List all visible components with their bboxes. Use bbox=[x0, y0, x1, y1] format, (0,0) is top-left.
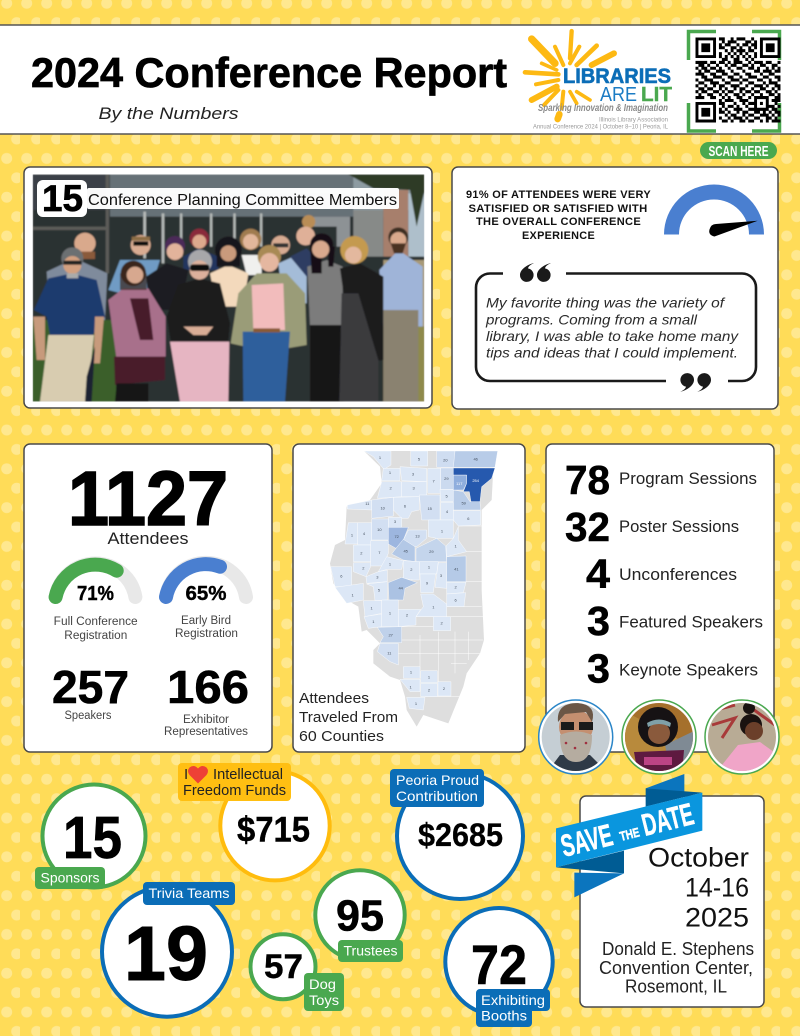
map of Illinois counties: 1 bbox=[352, 592, 355, 597]
map of Illinois counties: 1 bbox=[389, 562, 392, 567]
map of Illinois counties: 6 bbox=[404, 503, 407, 508]
map of Illinois counties: 117 bbox=[456, 481, 463, 486]
stat: unconferences bbox=[586, 551, 737, 597]
bubble: exhibiting booths: Exhibiting bbox=[481, 992, 545, 1008]
gauge: early bird 65 percent: 65% bbox=[186, 583, 227, 605]
bubble: intellectual freedom funds: $715 bbox=[237, 811, 310, 850]
gauge: early bird 65 percent: Early Bird bbox=[181, 615, 231, 627]
map of Illinois counties: 1 bbox=[389, 470, 392, 475]
map caption: Traveled From bbox=[299, 709, 398, 726]
map of Illinois counties: 6 bbox=[467, 516, 470, 521]
bubble: Peoria Proud contribution: $2685 bbox=[418, 817, 503, 853]
map of Illinois counties: 6 bbox=[340, 574, 343, 579]
map of Illinois counties: 72 bbox=[394, 534, 400, 539]
logo: Libraries Are Lit: ARE bbox=[600, 84, 637, 106]
map of Illinois counties: 20 bbox=[443, 457, 448, 462]
satisfaction text: 91% OF ATTENDEES WERE VERY bbox=[466, 189, 651, 201]
bubble: intellectual freedom funds: Freedom Funds bbox=[183, 782, 286, 799]
stat: exhibitor representatives: Representatives bbox=[164, 726, 248, 738]
map of Illinois counties: 2 bbox=[441, 620, 444, 625]
ribbon: save the date: THE bbox=[618, 824, 641, 844]
callout: 15 committee members: Conference Planning Committee Members bbox=[88, 192, 397, 209]
map of Illinois counties: 1 bbox=[455, 543, 458, 548]
bubble: dog toys: Dog bbox=[309, 976, 336, 992]
gauge: full conference 71 percent: Registration bbox=[64, 630, 127, 642]
map caption: 60 Counties bbox=[299, 728, 384, 745]
stat: program sessions bbox=[565, 457, 757, 503]
bubble: Peoria Proud contribution bbox=[390, 769, 523, 899]
logo: Libraries Are Lit: LIBRARIES bbox=[563, 65, 671, 88]
stat: speakers: Speakers bbox=[64, 710, 112, 722]
scan here pill bbox=[700, 142, 777, 160]
1127 attendees: 1127 bbox=[68, 456, 228, 542]
stat: poster sessions bbox=[565, 504, 739, 550]
bubble: sponsors bbox=[35, 784, 146, 889]
bubble: trustees: Trustees bbox=[344, 943, 398, 959]
map of Illinois counties: 7 bbox=[378, 550, 381, 555]
map of Illinois counties: 1 bbox=[351, 532, 354, 537]
logo: Libraries Are Lit: Sparking Innovation & Imagination bbox=[538, 103, 668, 114]
map of Illinois counties: 3 bbox=[376, 574, 379, 579]
map of Illinois counties: 2 bbox=[362, 565, 365, 570]
header band bbox=[0, 25, 800, 134]
callout: 15 committee members bbox=[37, 178, 399, 219]
bubble: exhibiting booths bbox=[445, 908, 553, 1027]
stat: speakers: 257 bbox=[52, 661, 129, 713]
panel: satisfaction and quote bbox=[452, 167, 778, 409]
bubble: trivia teams: 19 bbox=[124, 911, 208, 997]
stat: program sessions: Program Sessions bbox=[619, 469, 757, 488]
date: 2025 bbox=[685, 903, 749, 933]
map of Illinois counties: 3 bbox=[440, 573, 443, 578]
date: October bbox=[648, 843, 749, 873]
title: 2024 Conference Report bbox=[31, 49, 507, 96]
map of Illinois counties: 2 bbox=[406, 612, 409, 617]
bubble: dog toys: Toys bbox=[309, 992, 339, 1008]
map of Illinois counties: 10 bbox=[380, 505, 386, 510]
map of Illinois counties: 5 bbox=[378, 588, 381, 593]
stat: featured speakers: 3 bbox=[587, 598, 610, 644]
map of Illinois counties: 3 bbox=[394, 519, 397, 524]
map of Illinois counties: 27 bbox=[388, 633, 394, 638]
map of Illinois counties: 6 bbox=[455, 597, 458, 602]
map of Illinois counties: 2 bbox=[443, 686, 446, 691]
stat: keynote speakers: 3 bbox=[587, 646, 610, 692]
venue: Rosemont, IL bbox=[625, 977, 727, 997]
stat: keynote speakers: Keynote Speakers bbox=[619, 661, 758, 680]
map of Illinois counties: 29 bbox=[444, 476, 449, 481]
map caption bbox=[299, 690, 398, 745]
map of Illinois counties: 41 bbox=[454, 566, 459, 571]
map of Illinois counties: 4 bbox=[446, 509, 449, 514]
bubble: intellectual freedom funds: Intellectual bbox=[213, 766, 283, 783]
bubble: dog toys bbox=[250, 934, 344, 1011]
logo: Libraries Are Lit: Illinois Library Association bbox=[599, 117, 668, 124]
map of Illinois counties: 1 bbox=[410, 670, 413, 675]
venue bbox=[599, 939, 754, 997]
bubble: trivia teams: Trivia Teams bbox=[148, 885, 230, 901]
panel: committee photo bbox=[24, 167, 432, 408]
gauge: full conference 71 percent bbox=[54, 563, 138, 642]
ribbon: save the date: SAVE bbox=[557, 817, 616, 864]
callout: 15 committee members: 15 bbox=[42, 178, 83, 219]
map of Illinois counties: 1 bbox=[441, 529, 444, 534]
stat: exhibitor representatives: 166 bbox=[167, 661, 249, 713]
quote text: programs. Coming from a small bbox=[485, 311, 698, 327]
date bbox=[648, 843, 749, 933]
gauge: early bird 65 percent: Registration bbox=[175, 628, 238, 640]
gauge: full conference 71 percent: 71% bbox=[77, 583, 114, 605]
satisfaction text: THE OVERALL CONFERENCE bbox=[476, 216, 641, 228]
map of Illinois counties: 1 bbox=[379, 455, 382, 460]
bubble: sponsors: Sponsors bbox=[40, 870, 100, 886]
map of Illinois counties: 1 bbox=[428, 565, 431, 570]
scan here pill: SCAN HERE bbox=[708, 143, 768, 160]
bubble: intellectual freedom funds: I bbox=[184, 766, 188, 783]
map of Illinois counties: 1 bbox=[428, 674, 431, 679]
map of Illinois counties: 1 bbox=[372, 619, 375, 624]
bubble: Peoria Proud contribution: Peoria Proud bbox=[396, 772, 479, 788]
map of Illinois counties: 1 bbox=[389, 610, 392, 615]
map of Illinois counties: 7 bbox=[433, 478, 436, 483]
bubble: sponsors: 15 bbox=[63, 805, 122, 871]
map of Illinois counties: 1 bbox=[410, 685, 413, 690]
map of Illinois counties: 9 bbox=[426, 580, 429, 585]
venue: Convention Center, bbox=[599, 958, 753, 978]
map of Illinois counties: 2 bbox=[455, 585, 458, 590]
bubble: trustees bbox=[315, 870, 405, 962]
logo: Libraries Are Lit: LIT bbox=[641, 84, 672, 106]
stat: featured speakers bbox=[587, 598, 763, 644]
panel: attendees bbox=[24, 444, 272, 752]
map of Illinois counties: 45 bbox=[403, 548, 409, 553]
stat: poster sessions: Poster Sessions bbox=[619, 517, 739, 536]
avatar: speaker with beard bbox=[539, 700, 613, 775]
map of Illinois counties: 10 bbox=[377, 527, 382, 532]
venue: Donald E. Stephens bbox=[602, 939, 754, 959]
quote frame bbox=[476, 263, 756, 392]
map of Illinois counties: 3 bbox=[412, 471, 415, 476]
logo: Libraries Are Lit bbox=[525, 31, 672, 131]
map of Illinois counties: 46 bbox=[473, 456, 479, 461]
map of Illinois counties: 1 bbox=[432, 604, 435, 609]
map of Illinois counties: 2 bbox=[390, 485, 393, 490]
satisfaction text: EXPERIENCE bbox=[522, 230, 595, 242]
bubble: exhibiting booths: 72 bbox=[471, 933, 527, 996]
date: 14-16 bbox=[685, 873, 749, 903]
map of Illinois counties: 15 bbox=[427, 506, 433, 511]
bubble: intellectual freedom funds bbox=[178, 763, 330, 880]
subtitle: By the Numbers bbox=[98, 105, 238, 123]
quote text: My favorite thing was the variety of bbox=[486, 295, 726, 311]
gauge: full conference 71 percent: Full Conference bbox=[54, 616, 138, 628]
map of Illinois counties: 11 bbox=[387, 650, 392, 655]
panel: county map bbox=[293, 444, 525, 752]
gauge: early bird 65 percent bbox=[166, 563, 246, 640]
bubble: trivia teams bbox=[102, 882, 235, 1017]
map of Illinois counties: 44 bbox=[398, 586, 404, 591]
map of Illinois counties: 29 bbox=[429, 549, 434, 554]
map of Illinois counties: 2 bbox=[410, 567, 413, 572]
gauge: 91 percent bbox=[664, 184, 764, 236]
quote text: library, I was able to take home many bbox=[486, 328, 739, 344]
avatar: speaker in maroon shirt bbox=[622, 700, 696, 775]
map of Illinois counties: 13 bbox=[415, 534, 420, 539]
ribbon: save the date: DATE bbox=[638, 796, 697, 843]
map of Illinois counties: 5 bbox=[418, 457, 421, 462]
1127 attendees: Attendees bbox=[108, 529, 188, 548]
bubble: exhibiting booths: Booths bbox=[481, 1008, 527, 1024]
satisfaction text bbox=[466, 189, 651, 242]
bubble: trustees: 95 bbox=[336, 892, 384, 941]
bubble: dog toys: 57 bbox=[264, 948, 303, 986]
map of Illinois counties: 2 bbox=[360, 550, 363, 555]
map of Illinois counties: 254 bbox=[472, 478, 480, 483]
map of Illinois counties: 3 bbox=[413, 486, 416, 491]
icon: heart bbox=[188, 766, 208, 784]
map caption: Attendees bbox=[299, 690, 369, 707]
quote text bbox=[485, 295, 739, 361]
map of Illinois counties: 2 bbox=[428, 688, 431, 693]
map of Illinois counties: 59 bbox=[461, 501, 467, 506]
satisfaction text: SATISFIED OR SATISFIED WITH bbox=[468, 203, 648, 215]
avatar: speaker in pink bbox=[705, 700, 779, 775]
map of Illinois counties bbox=[330, 451, 498, 727]
panel: sessions bbox=[546, 444, 774, 752]
stat: exhibitor representatives: Exhibitor bbox=[183, 714, 229, 726]
stat: exhibitor representatives bbox=[164, 661, 249, 738]
stat: program sessions: 78 bbox=[565, 457, 610, 503]
stat: poster sessions: 32 bbox=[565, 504, 610, 550]
quote text: tips and ideas that I could implement. bbox=[486, 345, 738, 361]
panel: save the date bbox=[580, 796, 764, 1007]
bubble: Peoria Proud contribution: Contribution bbox=[396, 788, 478, 804]
ribbon: save the date bbox=[556, 774, 702, 897]
stat: keynote speakers bbox=[587, 646, 758, 692]
stat: unconferences: Unconferences bbox=[619, 565, 737, 584]
map of Illinois counties: 5 bbox=[446, 494, 449, 499]
stat: unconferences: 4 bbox=[586, 551, 610, 597]
map of Illinois counties: 4 bbox=[363, 531, 366, 536]
stat: featured speakers: Featured Speakers bbox=[619, 613, 763, 632]
photo of committee members bbox=[33, 174, 424, 402]
map of Illinois counties: 1 bbox=[371, 606, 374, 611]
logo: Libraries Are Lit: Annual Conference 2024 | October 8–10 | Peoria, IL bbox=[533, 124, 668, 131]
map of Illinois counties: 1 bbox=[415, 701, 418, 706]
QR code with green brackets bbox=[688, 32, 780, 131]
map of Illinois counties: 11 bbox=[365, 501, 370, 506]
